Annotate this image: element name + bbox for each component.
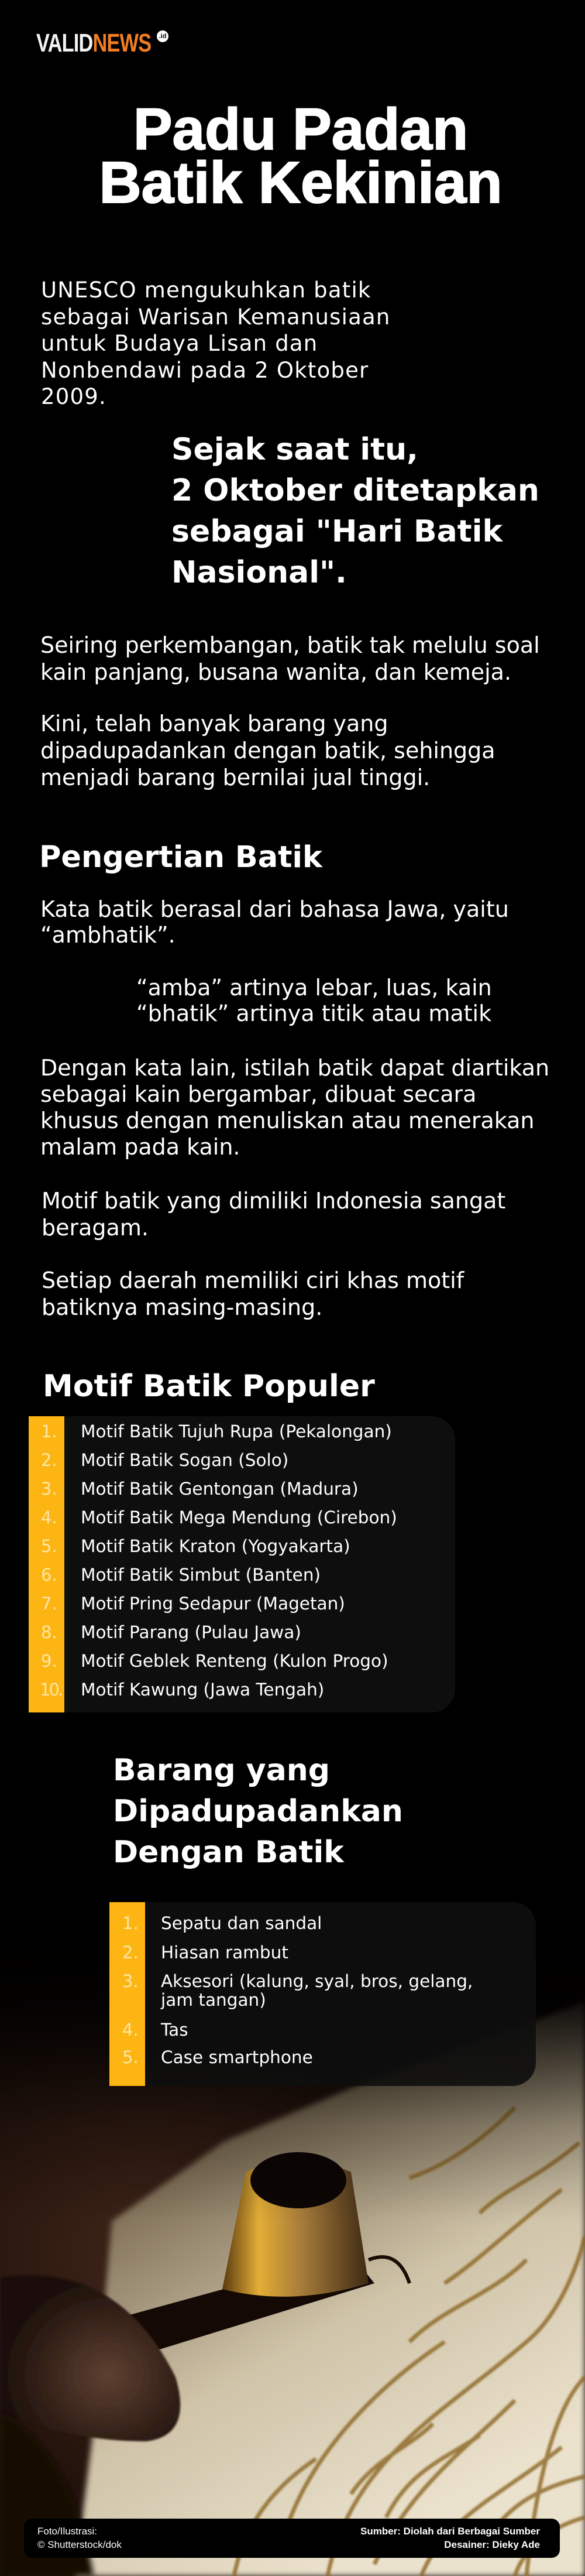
panel: list motif batik: 6. [41,1565,57,1585]
text: perkembangan [40,632,540,685]
text: perkembangan: kain panjang, busana wanita, dan kemeja. [40,659,511,685]
heading: Pengertian Batik: Pengertian Batik [39,840,322,875]
panel: list motif batik: Motif Geblek Renteng (Kulon Progo) [81,1651,388,1671]
panel: list motif batik: 3. [41,1479,57,1499]
number bar [29,1416,64,1712]
background photo: batik canting on cloth [0,2003,585,2576]
highlight: Hari Batik Nasional: Nasional". [171,555,347,590]
panel: list motif batik: 7. [41,1594,57,1614]
panel: list motif batik: Motif Batik Simbut (Banten) [81,1565,321,1585]
panel: list motif batik: Motif Batik Tujuh Rupa (Pekalongan) [81,1421,392,1441]
panel: list barang: jam tangan) [161,1990,266,2010]
footer: credits: Foto/Ilustrasi: [37,2526,97,2537]
footer: credits: © Shutterstock/dok [37,2539,122,2550]
panel: list barang: 1. [122,1913,139,1933]
panel: list barang: Case smartphone [161,2047,313,2067]
footer: credits: Sumber: Diolah dari Berbagai Sumber [360,2526,540,2537]
footer: credits: Desainer: Dieky Ade [444,2539,540,2550]
text: kini: menjadi barang bernilai jual tinggi. [40,765,430,790]
text: definisi [40,1055,549,1160]
panel: list motif batik: Motif Batik Kraton (Yogyakarta) [81,1536,350,1556]
heading: Barang yang Dipadupadankan: Dipadupadankan [113,1794,403,1829]
logo: VALIDNEWS.id: .id [159,33,166,40]
number bar [109,1902,145,2086]
highlight: Hari Batik Nasional: sebagai "Hari Batik [171,514,503,549]
panel: list motif batik: 10. [40,1680,61,1700]
intro text: UNESCO [41,278,391,409]
heading: Barang yang Dipadupadankan [113,1753,403,1870]
title: Padu Padan [133,97,468,162]
panel: list barang: 4. [122,2020,139,2040]
panel: list motif batik: 1. [41,1421,57,1441]
panel: list motif batik: Motif Batik Gentongan (Madura) [81,1479,359,1499]
panel: list motif batik: Motif Batik Sogan (Solo) [81,1450,288,1470]
highlight: Hari Batik Nasional: 2 Oktober ditetapkan [171,473,539,508]
text: asal kata: “ambhatik”. [40,922,176,948]
panel: list motif batik: 2. [41,1450,57,1470]
text: definisi: malam pada kain. [40,1134,240,1160]
intro text: UNESCO: sebagai Warisan Kemanusiaan [41,304,391,329]
panel: list barang: 2. [122,1943,139,1962]
heading: Barang yang Dipadupadankan: Dengan Batik [113,1835,344,1870]
text: ciri khas [42,1268,464,1320]
panel: list barang: Aksesori (kalung, syal, bros, gelang, [161,1971,473,1991]
title [99,97,503,215]
intro text: UNESCO: Nonbendawi pada 2 Oktober [41,357,369,383]
text: definisi: sebagai kain bergambar, dibuat secara [40,1081,476,1107]
panel: list barang: Hiasan rambut [161,1943,288,1962]
panel: list motif batik: 8. [41,1622,57,1642]
panel: list barang [109,1902,536,2086]
text: kini [40,711,495,790]
text: amba bhatik [136,975,492,1026]
text: amba bhatik: “bhatik” artinya titik atau matik [136,1001,491,1026]
text: kini: Kini, telah banyak barang yang [40,711,388,737]
text: motif beragam: beragam. [42,1215,149,1241]
text: ciri khas: batiknya masing-masing. [42,1294,322,1320]
panel: list motif batik: 4. [41,1508,57,1527]
panel: list barang: 5. [122,2047,139,2067]
canting [117,2254,374,2354]
highlight: Hari Batik Nasional [171,432,539,590]
text: definisi: khusus dengan menuliskan atau menerakan [40,1108,534,1133]
footer: credits [24,2519,560,2558]
panel: list barang: Sepatu dan sandal [161,1913,322,1933]
heading: Motif Batik Populer: Motif Batik Populer [43,1369,375,1404]
panel: list motif batik: Motif Kawung (Jawa Tengah) [81,1680,324,1700]
panel: list barang: Tas [161,2020,188,2040]
intro text: UNESCO: 2009. [41,384,106,409]
highlight: Hari Batik Nasional: Sejak saat itu, [171,432,418,467]
title: Batik Kekinian [99,150,503,215]
panel: list motif batik: Motif Parang (Pulau Jawa) [81,1622,301,1642]
intro text: UNESCO: untuk Budaya Lisan dan [41,331,318,356]
panel: list motif batik: Motif Pring Sedapur (Magetan) [81,1594,345,1614]
panel: list motif batik [29,1416,455,1712]
panel: list motif batik: Motif Batik Mega Mendung (Cirebon) [81,1508,397,1527]
text: perkembangan: Seiring perkembangan, batik tak melulu soal [40,632,540,658]
text: asal kata: Kata batik berasal dari bahasa Jawa, yaitu [40,896,509,922]
text: motif beragam [42,1188,505,1241]
panel: list barang: 3. [122,1971,139,1991]
logo: VALIDNEWS.id: VALIDNEWS [36,29,151,57]
intro text: UNESCO: UNESCO mengukuhkan batik [41,278,371,303]
text: asal kata [40,896,509,948]
panel: list motif batik: 5. [41,1536,57,1556]
panel: list motif batik: 9. [41,1651,57,1671]
text: kini: dipadupadankan dengan batik, sehingga [40,738,495,763]
text: amba bhatik: “amba” artinya lebar, luas, kain [136,975,492,1001]
heading: Barang yang Dipadupadankan: Barang yang [113,1753,330,1788]
text: motif beragam: Motif batik yang dimiliki Indonesia sangat [42,1188,505,1214]
text: definisi: Dengan kata lain, istilah batik dapat diartikan [40,1055,549,1081]
thumb [0,2275,180,2441]
text: ciri khas: Setiap daerah memiliki ciri khas motif [42,1268,464,1293]
